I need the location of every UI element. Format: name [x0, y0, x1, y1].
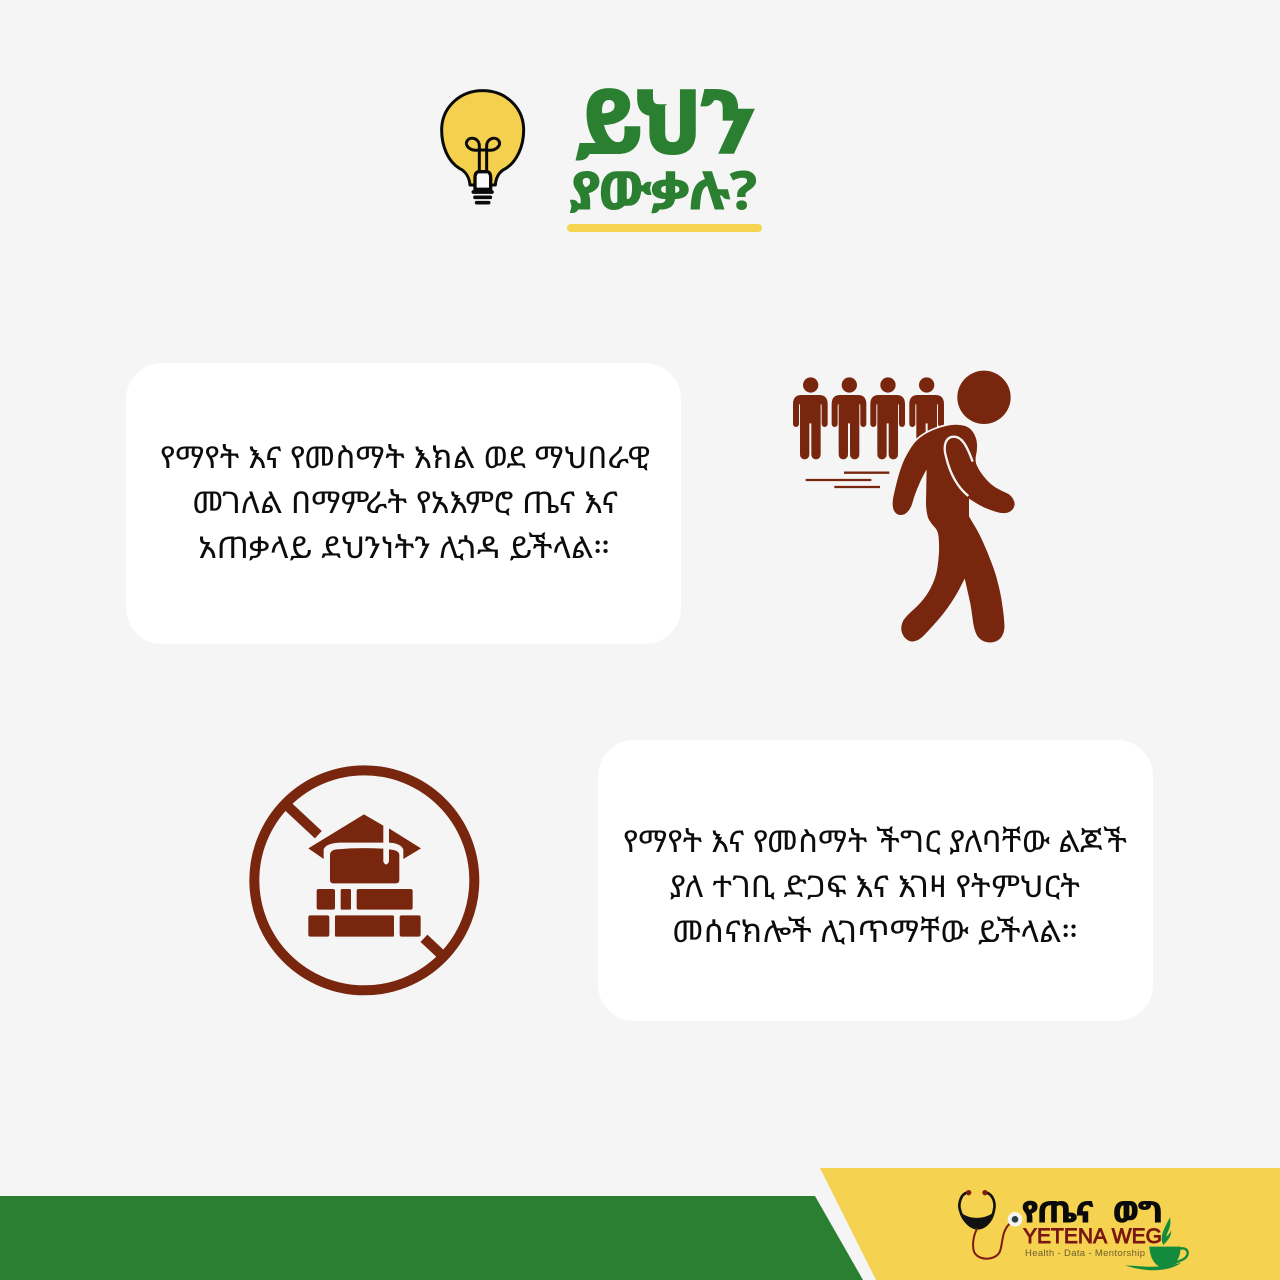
title: [570, 59, 757, 225]
panel: education barriers: መሰናክሎች ሊገጥማቸው ይችላል።: [672, 910, 1078, 951]
panel: social withdrawal: መገለል በማምራት የአእምሮ ጤና እና: [192, 481, 618, 522]
logo Amharic name: የጤና: [1022, 1192, 1093, 1231]
title: ያውቃሉ?: [570, 154, 757, 225]
footer green band: [0, 1196, 863, 1280]
icon: no education: [254, 770, 474, 990]
panel: social withdrawal: አጠቃላይ ደህንነትን ሊጎዳ ይችላል።: [198, 526, 610, 567]
icon: stethoscope: [959, 1190, 1022, 1259]
panel: social withdrawal: የማየት እና የመስማት እክል ወደ ማህበራዊ: [160, 436, 650, 477]
logo Latin name: YETENA WEG: [1023, 1225, 1162, 1248]
icon: light bulb: [442, 91, 524, 203]
logo tagline: Health - Data - Mentorship: [1025, 1248, 1145, 1259]
logo: Yetena Weg: [959, 1190, 1188, 1270]
icon: person walking away from group: [793, 371, 1014, 642]
panel: social withdrawal: [126, 363, 681, 644]
footer yellow band: [820, 1168, 1280, 1280]
icon: green tea cup: [1125, 1217, 1188, 1270]
logo Amharic name: [1022, 1192, 1163, 1231]
panel: education barriers: የማየት እና የመስማት ችግር ያለባቸው ልጆች: [623, 820, 1127, 861]
title: ይህን: [575, 59, 756, 179]
logo Amharic name: ወግ: [1113, 1192, 1163, 1231]
title underline: [567, 224, 762, 232]
panel: education barriers: ያለ ተገቢ ድጋፍ እና እገዛ የትምህርት: [670, 865, 1080, 906]
panel: education barriers: [598, 740, 1153, 1021]
